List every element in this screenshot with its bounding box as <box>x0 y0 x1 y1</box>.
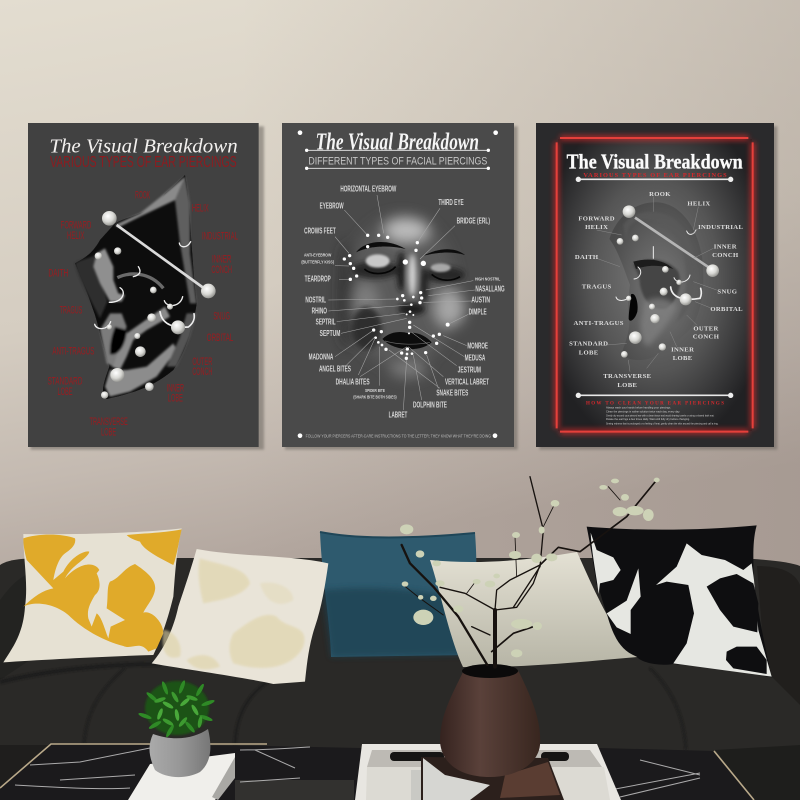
ear piercing labels: LOBE <box>101 427 116 439</box>
ear piercing labels: CONCH <box>712 252 739 259</box>
bottom rule <box>576 393 733 398</box>
facial piercing labels: EYEBROW <box>320 200 344 210</box>
facial piercing labels: NASALLANG <box>475 283 505 293</box>
ear piercing labels: LOBE <box>617 382 637 389</box>
ear piercing labels: CONCH <box>211 264 232 276</box>
ear piercing labels: LOBE <box>57 386 73 398</box>
facial piercing labels: LABRET <box>389 410 407 420</box>
facial piercing labels: BRIDGE (ERL) <box>457 216 490 226</box>
ear piercing labels: INDUSTRIAL <box>202 231 238 243</box>
white tray with magazine <box>355 744 621 800</box>
title rule <box>576 177 733 182</box>
ear piercing labels: CONCH <box>192 366 212 378</box>
ear piercing labels: OUTER <box>192 356 212 368</box>
ear piercing labels: STANDARD <box>47 376 82 388</box>
facial piercing labels: DIMPLE <box>469 306 487 316</box>
facial piercing labels: SEPTRIL <box>316 317 336 327</box>
corner studs <box>298 130 498 438</box>
facial piercing labels: SNAKE BITES <box>436 388 469 398</box>
stack of books <box>128 753 235 800</box>
facial piercing labels: TEARDROP <box>305 274 331 284</box>
magazine <box>421 757 564 800</box>
face illustration <box>341 215 465 377</box>
ear piercing labels: INNER <box>167 382 184 394</box>
facial piercing labels: VERTICAL LABRET <box>445 376 489 386</box>
red neon frame <box>557 138 753 432</box>
poster subtitle: VARIOUS TYPES OF EAR PIERCINGS <box>583 172 727 179</box>
care instructions: Rotate the earrings a few times daily. Wait until fully dry before changing. <box>606 417 690 421</box>
facial piercing labels: SEPTUM <box>320 328 340 338</box>
wall background <box>0 0 800 570</box>
facial piercing labels: (SHARK BITE BOTH SIDES) <box>353 395 397 401</box>
facial piercing labels: AUSTIN <box>471 295 490 305</box>
ear piercing labels: DAITH <box>48 267 68 279</box>
care instructions: Seeing redness that is prolonged or a feeling of heat, gently clean the skin around the piercing and call a ring. <box>606 421 719 425</box>
care instructions: Always wash your hands before handling your piercings. <box>606 406 671 410</box>
ear piercing labels: ROOK <box>135 189 150 201</box>
ear piercing labels: CONCH <box>693 334 720 341</box>
poster subtitle: VARIOUS TYPES OF EAR PIERCINGS <box>50 154 237 171</box>
piercing jewellery <box>95 211 216 399</box>
leader lines <box>328 195 475 410</box>
ear piercing labels: HELIX <box>192 202 209 214</box>
piercing jewellery <box>616 205 719 358</box>
facial piercing labels: HORIZONTAL EYEBROW <box>340 184 396 194</box>
off-white cushion <box>430 552 637 667</box>
care instructions: Clean the piercings in saline solution twice each day, every day. <box>606 409 680 413</box>
facial piercing labels <box>301 184 505 420</box>
ear piercing labels: OUTER <box>693 325 719 332</box>
ear piercing labels: SNUG <box>717 289 737 296</box>
ear piercing labels: INNER <box>714 243 737 250</box>
ear piercing labels: TRAGUS <box>582 283 612 290</box>
ear piercing labels: LOBE <box>673 355 693 362</box>
ear piercing labels: TRANSVERSE <box>603 373 652 380</box>
poster title: The Visual Breakdown <box>567 149 743 173</box>
ear piercing labels: FORWARD <box>578 215 615 222</box>
care heading: HOW TO CLEAN YOUR EAR PIERCINGS <box>586 401 724 406</box>
piercing dots <box>343 234 450 360</box>
facial piercing labels: CROWS FEET <box>304 225 336 235</box>
facial piercing labels: DOLPHIN BITE <box>413 400 447 410</box>
cow print cushion <box>587 525 772 677</box>
ear piercing labels: HELIX <box>585 224 608 231</box>
facial piercing labels: (BUTTERFLY KISS) <box>301 260 334 266</box>
ear piercing labels: TRANSVERSE <box>89 416 128 428</box>
footer note: FOLLOW YOUR PIERCERS AFTER-CARE INSTRUCTIONS TO THE LETTER; THEY KNOW WHAT THEY'RE DOING <box>306 433 492 438</box>
ear piercing labels: HELIX <box>67 230 85 242</box>
ear piercing labels: INDUSTRIAL <box>698 224 743 231</box>
ear piercing labels: ORBITAL <box>207 332 233 344</box>
brown vase <box>440 664 540 777</box>
facial piercing labels: SPIDER BITE <box>365 388 385 394</box>
ear piercing labels: ORBITAL <box>710 306 743 313</box>
poster title: The Visual Breakdown <box>316 130 479 156</box>
ear piercing labels: INNER <box>212 253 231 265</box>
ear piercing labels <box>47 189 238 439</box>
poster subtitle: DIFFERENT TYPES OF FACIAL PIERCINGS <box>308 155 488 167</box>
facial piercing labels: JESTRUM <box>458 364 481 374</box>
facial piercing labels: RHINO <box>312 306 327 316</box>
blossom branches <box>400 477 660 667</box>
title rules <box>305 149 490 170</box>
panel: ear piercings poster <box>28 123 264 450</box>
facial piercing labels: HIGH NOSTRIL <box>475 277 500 283</box>
ear piercing labels: ANTI-TRAGUS <box>52 345 95 357</box>
ear piercing labels: TRAGUS <box>60 304 83 316</box>
ear piercing labels: SNUG <box>213 311 230 323</box>
facial piercing labels: MEDUSA <box>465 352 485 362</box>
leader lines <box>597 197 717 372</box>
care instructions: Gently dry around your pierced ear with a clean tissue and avoid sharing towels or using a shared bath mat. <box>606 413 715 417</box>
ear illustration <box>75 175 197 399</box>
facial piercing labels: DHALIA BITES <box>336 376 370 386</box>
panel: facial piercings poster <box>282 123 518 450</box>
panel: dark ear poster with red frame <box>536 123 777 450</box>
ear piercing labels: ROOK <box>649 191 671 198</box>
sofa <box>0 558 800 800</box>
facial piercing labels: MADONNA <box>309 351 333 361</box>
plant pot <box>149 729 210 777</box>
ear piercing labels: HELIX <box>687 201 711 208</box>
yellow floral cushion <box>3 528 182 662</box>
coffee table <box>0 744 754 800</box>
blue cushion <box>320 532 476 657</box>
cream floral cushion <box>152 549 328 684</box>
ear piercing labels <box>569 191 743 389</box>
ear piercing labels: ANTI-TRAGUS <box>574 320 624 327</box>
plant leaves <box>138 680 215 738</box>
ear piercing labels: LOBE <box>168 393 183 405</box>
ear piercing labels: STANDARD <box>569 341 608 348</box>
ear piercing labels: INNER <box>671 346 694 353</box>
facial piercing labels: NOSTRIL <box>305 295 326 305</box>
ear piercing labels: FORWARD <box>61 219 91 231</box>
facial piercing labels: MONROE <box>467 341 488 351</box>
ear piercing labels: LOBE <box>579 349 599 356</box>
facial piercing labels: ANTI-EYEBROW <box>304 253 332 259</box>
facial piercing labels: THIRD EYE <box>438 197 464 207</box>
potted plant on books <box>128 680 235 800</box>
ear piercing labels: DAITH <box>575 254 599 261</box>
3D ear illustration <box>609 202 703 360</box>
care instructions <box>606 406 719 425</box>
poster title: The Visual Breakdown <box>49 135 238 157</box>
facial piercing labels: ANGEL BITES <box>319 363 351 373</box>
